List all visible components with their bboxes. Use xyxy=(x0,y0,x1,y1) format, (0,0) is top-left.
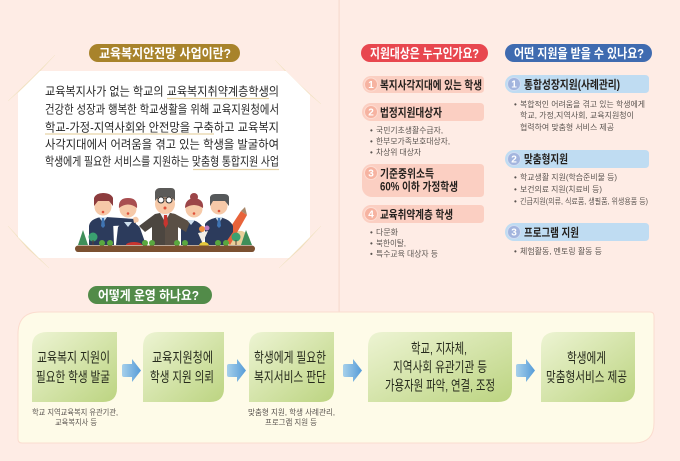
arrow 3 xyxy=(343,359,362,382)
item 3: 60% 이하 가정학생 xyxy=(380,180,458,194)
white chamfered card xyxy=(18,71,310,258)
item 2 details: • xyxy=(370,148,373,157)
item 4 xyxy=(362,205,484,223)
step 1 caption: 학교 지역교육복지 유관기관, xyxy=(32,407,118,417)
heading: intro: 교육복지안전망 사업이란? xyxy=(99,46,231,61)
item 4 details: • xyxy=(370,228,373,237)
step 5: 맞춤형서비스 제공 xyxy=(546,369,627,385)
text block: intro description: 학생에게 필요한 서비스를 지원하는 맞춤형 통합지원 사업 xyxy=(45,154,279,168)
text block: intro description: 건강한 성장과 행복한 학교생활을 위해 교육지원청에서 xyxy=(45,102,279,116)
arrow 2 xyxy=(227,359,246,382)
step 1 caption xyxy=(32,407,118,427)
step 1 caption: 교육복지사 등 xyxy=(55,418,97,427)
step 2: 학생 지원 의뢰 xyxy=(150,369,214,385)
step 2: 교육지원청에 xyxy=(152,350,213,366)
support 1 details xyxy=(514,99,645,132)
step 3: 학생에게 필요한 xyxy=(254,350,326,366)
text block: intro description: 교육복지사가 없는 학교의 교육복지취약계층학생의 xyxy=(45,84,279,98)
item 2 details: • xyxy=(370,137,373,146)
item 1: 복지사각지대에 있는 학생 xyxy=(380,78,482,92)
support 2 details: • xyxy=(514,173,517,182)
item 4 details: • xyxy=(370,239,373,248)
step 4 xyxy=(368,332,512,402)
step 3 caption xyxy=(248,407,335,427)
step 1 xyxy=(32,332,117,402)
item 2 details: 한부모가족보호대상자, xyxy=(376,136,450,146)
support 3 details: • xyxy=(514,247,517,256)
item 2 details xyxy=(370,125,450,157)
support 1: 통합성장지원(사례관리) xyxy=(524,78,620,92)
support 2 details: • xyxy=(514,185,517,194)
support 1: 1 xyxy=(511,80,517,90)
support 2 xyxy=(505,150,649,168)
panel: available support xyxy=(505,44,652,256)
item 2 details: • xyxy=(370,126,373,135)
panel: program intro xyxy=(8,44,321,268)
item 2: 2 xyxy=(368,108,374,118)
item 4: 교육취약계층 학생 xyxy=(380,208,453,222)
support 3 xyxy=(505,223,649,241)
step 3: 복지서비스 판단 xyxy=(254,369,326,385)
support 2 details: 보건의료 지원(치료비 등) xyxy=(520,184,602,194)
support 1 details: • xyxy=(514,100,517,109)
step 3 caption: 맞춤형 지원, 학생 사례관리, xyxy=(248,407,335,417)
support 2: 2 xyxy=(511,154,517,166)
item 4 details xyxy=(370,228,438,258)
item 3 xyxy=(362,164,484,197)
support 1 details: 학교, 가정,지역사회, 교육지원청이 xyxy=(520,110,634,120)
heading: support: 어떤 지원을 받을 수 있나요? xyxy=(514,46,644,61)
support 1 xyxy=(505,75,649,93)
item 2 xyxy=(362,103,484,121)
support 3: 3 xyxy=(511,228,517,238)
support 2: 맞춤형지원 xyxy=(524,152,568,166)
item 2: 법정지원대상자 xyxy=(380,106,442,120)
support 1 details: 협력하여 맞춤형 서비스 제공 xyxy=(520,122,614,132)
item 2 details: 국민기초생활수급자, xyxy=(376,125,443,135)
support 3: 프로그램 지원 xyxy=(524,226,579,240)
step 4: 가용자원 파악, 연결, 조정 xyxy=(385,378,495,394)
step 5 xyxy=(541,332,635,402)
support 2 details: • xyxy=(514,197,517,206)
item 3: 기준중위소득 xyxy=(380,166,434,180)
step 3 caption: 프로그램 지원 등 xyxy=(265,417,317,427)
text block: intro description xyxy=(45,84,279,170)
step 1: 필요한 학생 발굴 xyxy=(36,369,110,385)
item 1: 1 xyxy=(368,80,374,91)
text block: intro description: 학교-가정-지역사회와 안전망을 구축하고 교육복지 xyxy=(45,120,279,134)
arrow 4 xyxy=(516,359,535,382)
item 3: 3 xyxy=(368,168,374,180)
support 2 details: 학교생활 지원(학습준비물 등) xyxy=(520,172,617,182)
item 1 xyxy=(362,76,484,93)
item 4 details: 북한이탈, xyxy=(376,238,406,248)
heading: eligibility: 지원대상은 누구인가요? xyxy=(370,46,479,61)
support 3 details: 체험활동, 멘토링 활동 등 xyxy=(520,246,602,256)
item 4: 4 xyxy=(368,210,374,220)
item 4 details: 특수교육 대상자 등 xyxy=(376,248,438,258)
panel: who is eligible xyxy=(361,44,488,258)
support 2 details xyxy=(514,172,648,206)
heading: operation: 어떻게 운영 하나요? xyxy=(98,288,199,303)
step 5: 학생에게 xyxy=(567,350,606,366)
arrow 1 xyxy=(122,359,141,382)
icon: teacher and students illustration xyxy=(75,188,255,252)
text block: intro description: 사각지대에서 어려움을 겪고 있는 학생을 발굴하여 xyxy=(45,138,279,152)
step 3 xyxy=(249,332,334,402)
step 4: 지역사회 유관기관 등 xyxy=(393,359,487,375)
flow container xyxy=(18,312,654,443)
support 1 details: 복합적인 어려움을 겪고 있는 학생에게 xyxy=(520,99,645,109)
item 4 details: • xyxy=(370,250,373,258)
step 1: 교육복지 지원이 xyxy=(37,350,110,366)
step 4: 학교, 지자체, xyxy=(411,340,467,356)
support 2 details: 긴급지원(의류, 식료품, 생필품, 위생용품 등) xyxy=(520,196,648,206)
step 2 xyxy=(143,332,224,402)
item 2 details: 차상위 대상자 xyxy=(376,147,422,157)
panel: how it operates xyxy=(18,286,654,443)
item 4 details: 다문화 xyxy=(376,228,399,237)
